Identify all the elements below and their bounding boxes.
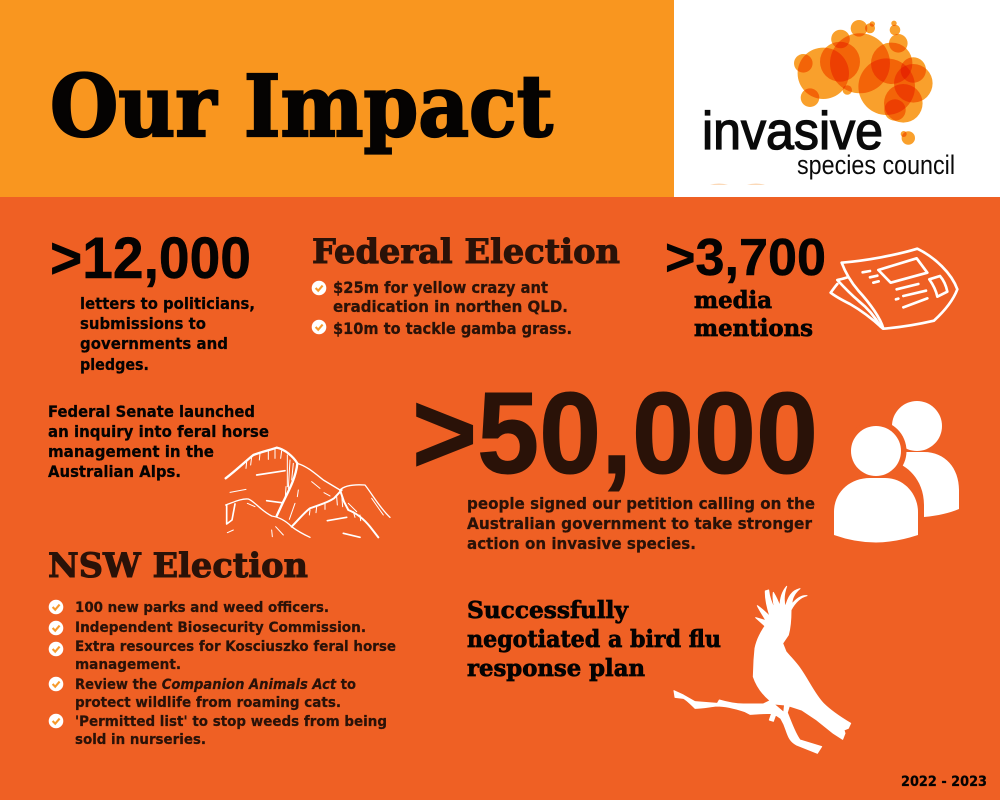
faint logo remnants	[710, 184, 765, 185]
letters description: pledges.	[80, 355, 149, 374]
media mentions label: mentions	[694, 315, 813, 342]
logo strapline: species council	[797, 150, 955, 180]
letters description: governments and	[80, 334, 228, 353]
NSW pledges list: protect wildlife from roaming cats.	[75, 695, 341, 711]
text: Federal Senate inquiry: an inquiry into feral horse	[48, 422, 269, 441]
text: bird flu response plan: negotiated a bird flu	[467, 626, 721, 653]
icon: mountains sketch	[226, 448, 390, 537]
petition description	[467, 494, 815, 553]
stat: petition signatures: >50,000	[412, 368, 818, 498]
date label: 2022 - 2023	[901, 774, 987, 790]
text: Federal Senate inquiry	[48, 402, 269, 481]
stat: letters: >12,000	[50, 226, 251, 291]
NSW pledges list: Extra resources for Kosciuszko feral horse	[75, 639, 396, 655]
stat: media mentions: >3,700	[665, 229, 826, 287]
petition description: people signed our petition calling on the	[467, 494, 815, 513]
icon: people	[834, 401, 959, 542]
federal pledges list: eradication in northen QLD.	[333, 298, 568, 316]
panel: Federal Election	[312, 232, 620, 338]
icon: newspaper	[831, 249, 957, 329]
text: Federal Senate inquiry: Australian Alps.	[48, 462, 181, 481]
NSW pledges list: sold in nurseries.	[75, 732, 206, 748]
federal pledges list: $10m to tackle gamba grass.	[333, 320, 572, 338]
title: Our Impact	[50, 57, 553, 157]
media mentions label	[694, 287, 813, 342]
stat: letters	[50, 226, 255, 374]
federal pledges list	[312, 279, 572, 338]
stat: petition signatures	[412, 368, 818, 553]
logo panel: Invasive Species Council	[674, 0, 1000, 197]
letters description: submissions to	[80, 314, 206, 333]
text: bird flu response plan: Successfully	[467, 597, 629, 624]
NSW pledges list: 'Permitted list' to stop weeds from being	[75, 714, 387, 730]
text: Federal Senate inquiry: management in the	[48, 442, 214, 461]
text: bird flu response plan: response plan	[467, 655, 645, 682]
NSW pledges list: management.	[75, 657, 181, 673]
logo wordmark: invasive	[702, 102, 883, 161]
NSW pledges list: 100 new parks and weed officers.	[75, 600, 329, 616]
media mentions label: media	[694, 287, 772, 314]
letters description	[80, 294, 255, 374]
icon: Australia map made of circles	[794, 20, 933, 145]
NSW pledges list: Independent Biosecurity Commission.	[75, 620, 366, 636]
petition description: Australian government to take stronger	[467, 514, 812, 533]
heading: Federal Election: Federal Election	[312, 232, 620, 272]
NSW pledges list: Review the Companion Animals Act to	[75, 677, 356, 693]
letters description: letters to politicians,	[80, 294, 255, 313]
text: bird flu response plan	[467, 597, 721, 682]
NSW pledges list	[49, 600, 396, 748]
stat: media mentions	[665, 229, 826, 342]
header banner	[0, 0, 674, 197]
federal pledges list: $25m for yellow crazy ant	[333, 279, 549, 297]
text: Federal Senate inquiry: Federal Senate launched	[48, 402, 255, 421]
petition description: action on invasive species.	[467, 534, 696, 553]
heading: NSW Election: NSW Election	[48, 546, 308, 586]
icon: cockatoo on branch	[674, 586, 851, 753]
panel: NSW Election	[48, 546, 396, 748]
